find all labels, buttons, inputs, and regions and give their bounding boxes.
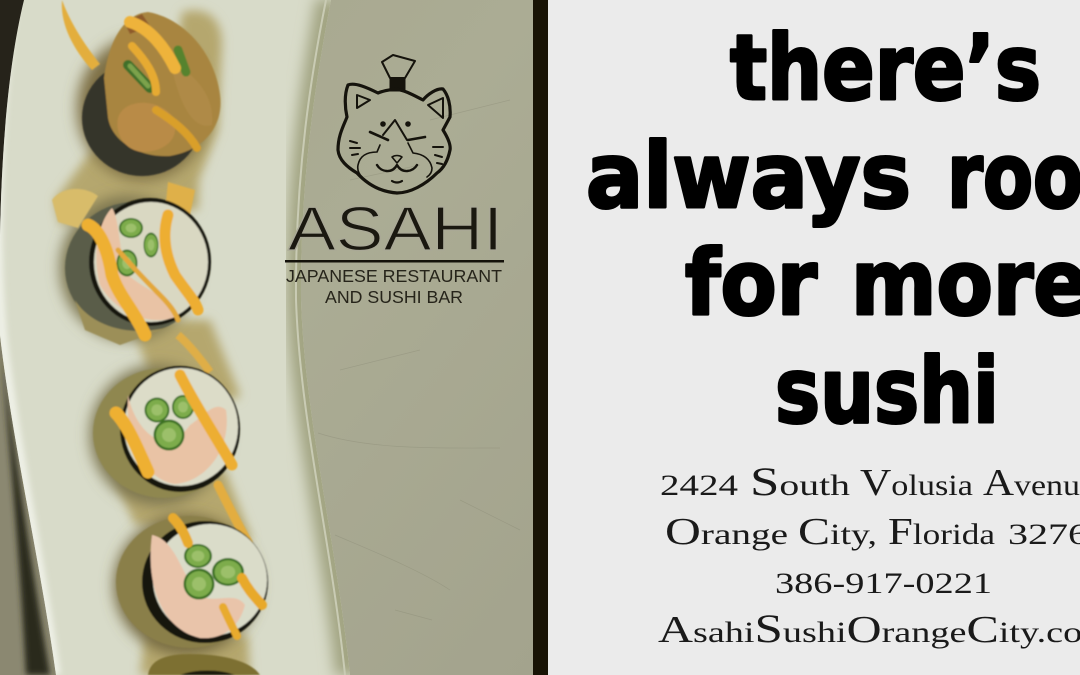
logo wordmark: ASAHI [288, 195, 503, 264]
address block: O range [665, 511, 788, 553]
logo: Asahi: AND SUSHI BAR [325, 287, 463, 307]
sushi roll 1: tempura top [62, 0, 221, 176]
icon: cat mascot [338, 55, 450, 193]
heading: sushi [775, 339, 999, 444]
sushi roll 5 partial [148, 654, 260, 675]
address block: A sahi Sushi O range City.com [658, 606, 1080, 651]
address block: City, [798, 511, 877, 553]
shadows under rolls [77, 36, 209, 180]
address block: 386-917-0221 [775, 567, 992, 600]
address block [658, 459, 1080, 651]
sushi roll 4 [116, 516, 268, 648]
panel: food photo [0, 0, 533, 675]
heading: for [685, 231, 818, 336]
white plate [0, 0, 360, 675]
plate rim shading [301, 0, 350, 675]
sushi roll 2 [52, 182, 211, 345]
divider bar [533, 0, 548, 675]
sushi roll 3 [93, 335, 248, 542]
address block: Volusia [860, 462, 973, 504]
address block: South [750, 459, 850, 504]
heading: always [586, 124, 911, 229]
address block: Florida [888, 511, 995, 553]
logo tagline: JAPANESE RESTAURANT [286, 266, 502, 286]
panel: text background [548, 0, 1080, 675]
address block: 2424 [660, 469, 738, 502]
steel scratches [318, 100, 520, 620]
heading [586, 16, 1080, 444]
table background left of plate [0, 0, 60, 675]
sauce pool [55, 10, 252, 675]
logo: Asahi [285, 55, 504, 307]
